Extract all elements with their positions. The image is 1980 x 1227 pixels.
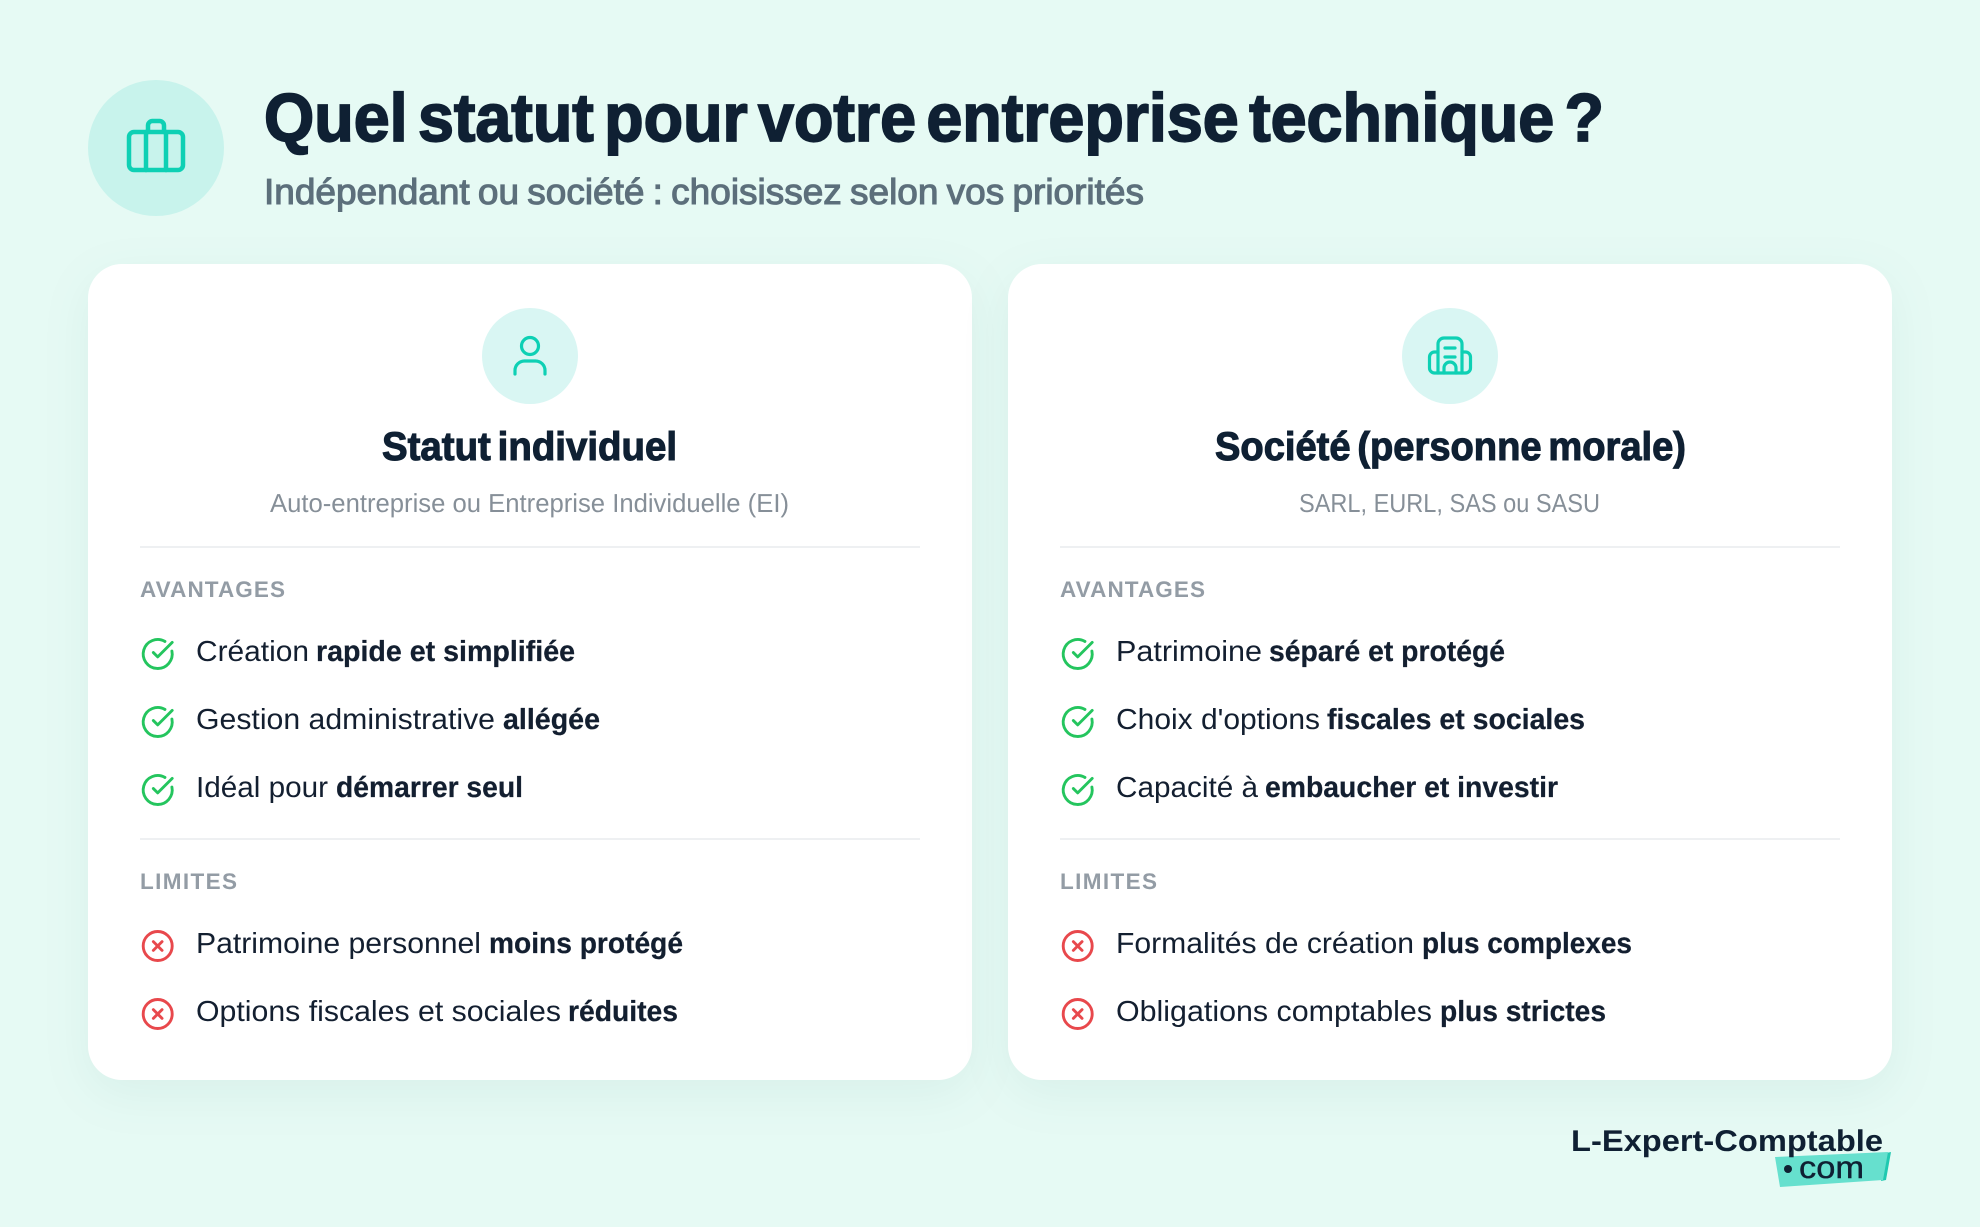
advantage row 1: séparé et protégé	[1269, 636, 1505, 668]
advantage row 1: Création	[196, 636, 309, 668]
advantage row 3: embaucher et investir	[1265, 772, 1558, 804]
limit row 1: moins protégé	[489, 928, 683, 960]
limit row 1	[1063, 928, 1632, 960]
limit row 2	[143, 996, 678, 1028]
title: Quel statut pour votre entreprise technique ?	[264, 80, 1604, 156]
section label: avantages: AVANTAGES	[1060, 577, 1205, 602]
advantage row 3	[143, 772, 523, 804]
icon: building	[1402, 308, 1498, 404]
advantage row 2	[1063, 704, 1585, 736]
panel: société	[1008, 264, 1892, 1080]
panel: statut individuel	[88, 264, 972, 1080]
advantage row 1	[1063, 636, 1505, 668]
limit row 2	[1063, 996, 1606, 1028]
advantage row 2: Choix d'options	[1116, 704, 1320, 736]
advantage row 1	[143, 636, 575, 668]
advantage row 3: Idéal pour	[196, 772, 328, 804]
logo: L-Expert-Comptable.com	[1571, 1125, 1891, 1187]
advantage row 3	[1063, 772, 1558, 804]
limit row 2: plus strictes	[1440, 996, 1606, 1028]
header	[88, 80, 1604, 216]
limit row 1: Patrimoine personnel	[196, 928, 481, 960]
limit row 1: Formalités de création	[1116, 928, 1414, 960]
subheading: Auto-entreprise ou Entreprise Individuelle (EI)	[270, 488, 789, 518]
icon: briefcase	[88, 80, 224, 216]
limit row 2: Obligations comptables	[1116, 996, 1432, 1028]
advantage row 1: rapide et simplifiée	[316, 636, 575, 668]
icon: person	[482, 308, 578, 404]
section label: avantages: AVANTAGES	[140, 577, 285, 602]
section label: limites: LIMITES	[1060, 869, 1157, 894]
logo: L-Expert-Comptable.com: com	[1799, 1150, 1864, 1185]
subtitle: Indépendant ou société : choisissez selon vos priorités	[264, 171, 1144, 212]
limit row 2: réduites	[568, 996, 678, 1028]
subheading: SARL, EURL, SAS ou SASU	[1299, 488, 1600, 518]
limit row 2: Options fiscales et sociales	[196, 996, 561, 1028]
section label: limites: LIMITES	[140, 869, 237, 894]
advantage row 3: démarrer seul	[336, 772, 523, 804]
advantage row 2: fiscales et sociales	[1327, 704, 1585, 736]
limit row 1	[143, 928, 683, 960]
limit row 1: plus complexes	[1422, 928, 1632, 960]
heading: société: Société (personne morale)	[1215, 425, 1686, 469]
heading: statut individuel: Statut individuel	[382, 425, 677, 469]
advantage row 2: Gestion administrative	[196, 704, 495, 736]
advantage row 2	[143, 704, 600, 736]
logo: L-Expert-Comptable.com: L-Expert-Comptable	[1571, 1125, 1883, 1158]
advantage row 1: Patrimoine	[1116, 636, 1262, 668]
advantage row 2: allégée	[503, 704, 600, 736]
advantage row 3: Capacité à	[1116, 772, 1259, 804]
